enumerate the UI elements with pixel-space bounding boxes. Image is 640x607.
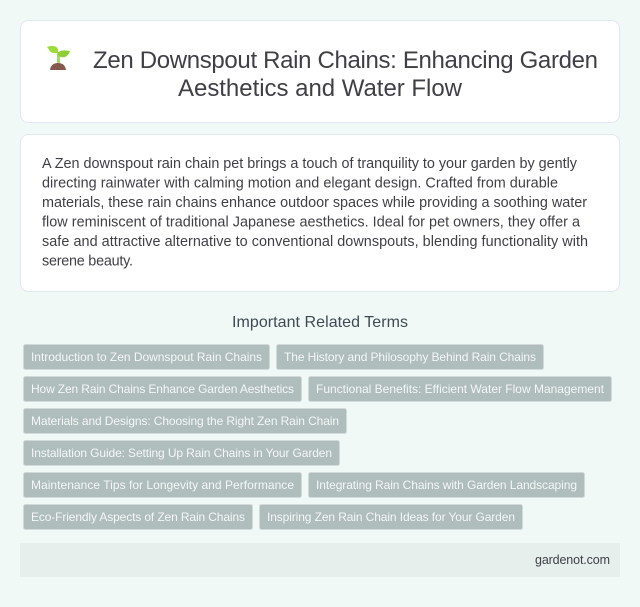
tag (24, 408, 346, 434)
tag: Functional Benefits: Efficient Water Flow Management (316, 382, 605, 396)
title: Zen Downspout Rain Chains: Enhancing Garden (93, 47, 598, 74)
tag (24, 504, 252, 530)
footer source: gardenot.com (535, 553, 610, 567)
description text: directing rainwater with calming motion and elegant design. Crafted from durable (42, 176, 558, 192)
tag: How Zen Rain Chains Enhance Garden Aesthetics (31, 382, 294, 396)
tag: Maintenance Tips for Longevity and Performance (31, 478, 294, 492)
heading: related terms: Important Related Terms (232, 314, 408, 331)
tag: Introduction to Zen Downspout Rain Chains (31, 350, 262, 364)
tag: Integrating Rain Chains with Garden Landscaping (316, 478, 577, 492)
tag list (24, 344, 612, 530)
tag (260, 504, 522, 530)
description text: materials, these rain chains enhance outdoor spaces while providing a soothing water (42, 195, 587, 211)
tag: The History and Philosophy Behind Rain Chains (284, 350, 536, 364)
footer bar (20, 543, 620, 577)
description text (42, 156, 588, 270)
icon: seedling (47, 46, 70, 70)
tag: Eco-Friendly Aspects of Zen Rain Chains (31, 510, 245, 524)
panel: description (20, 134, 620, 292)
tag (24, 472, 302, 498)
tag (24, 376, 302, 402)
panel: title card (20, 20, 620, 122)
description text: serene beauty. (42, 254, 133, 270)
tag (308, 376, 612, 402)
tag (276, 344, 544, 370)
tag: Materials and Designs: Choosing the Right Zen Rain Chain (31, 414, 339, 428)
tag (308, 472, 584, 498)
title: Aesthetics and Water Flow (178, 75, 463, 102)
tag: Inspiring Zen Rain Chain Ideas for Your Garden (267, 510, 515, 524)
description text: A Zen downspout rain chain pet brings a touch of tranquility to your garden by gently (42, 156, 578, 172)
description text: flow reminiscent of traditional Japanese aesthetics. Ideal for pet owners, they offer a (42, 214, 580, 230)
tag (24, 440, 340, 466)
tag: Installation Guide: Setting Up Rain Chains in Your Garden (31, 446, 332, 460)
tag (24, 344, 270, 370)
title (93, 47, 598, 102)
description text: safe and attractive alternative to conventional downspouts, blending functionality with (42, 234, 588, 250)
